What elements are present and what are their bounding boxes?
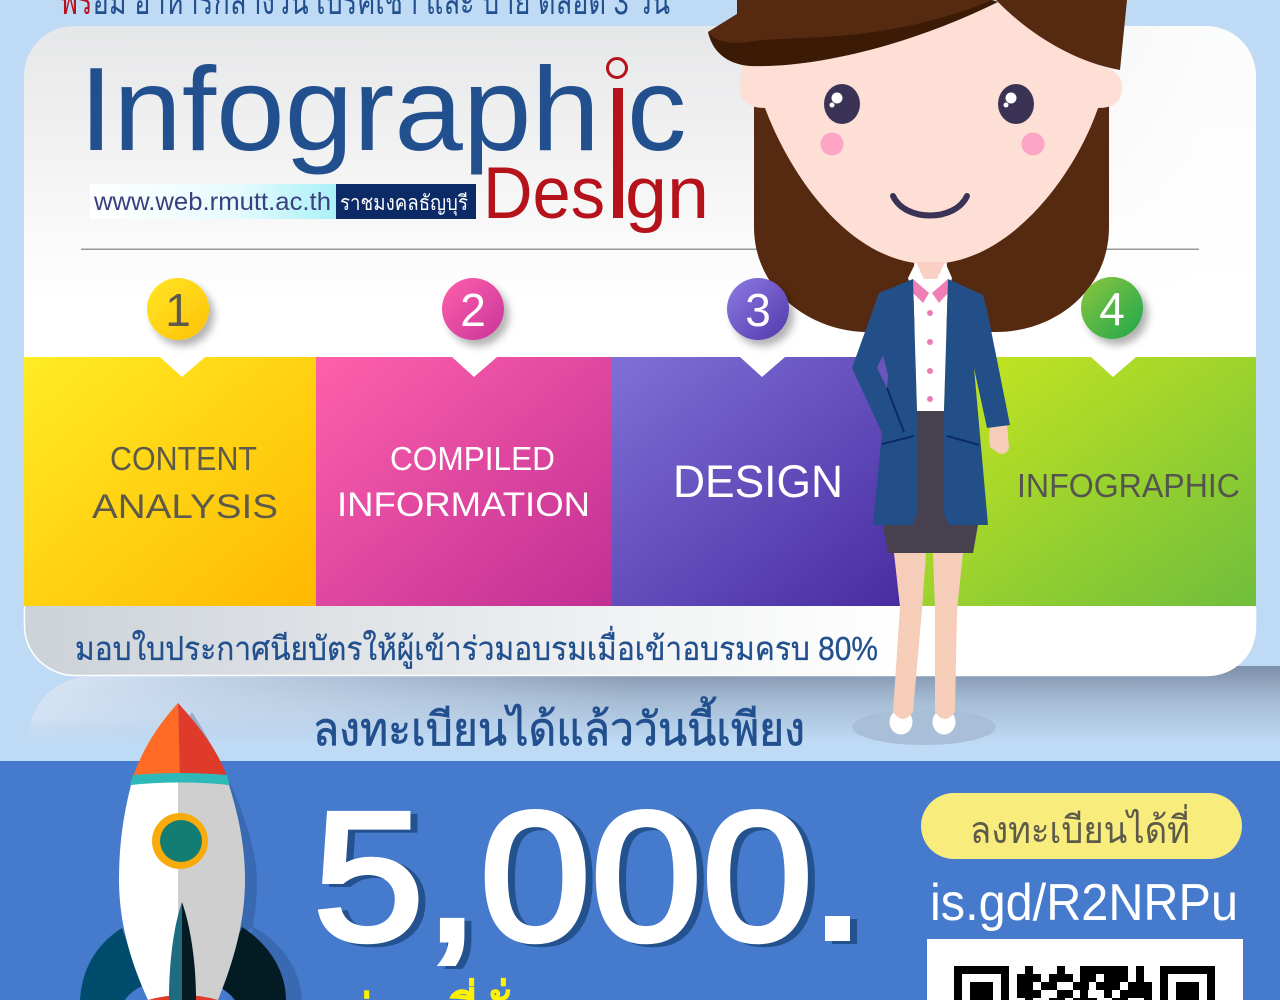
cheeks: [820, 132, 1044, 156]
shirt: [913, 279, 948, 411]
eyes: [824, 84, 1034, 124]
website bar: www.web.rmutt.ac.th: [93, 188, 331, 216]
legs: [890, 553, 963, 734]
certificate note: มอบใบประกาศนียบัตรให้ผู้เข้าร่วมอบรมเมื่อเข้าอบรมครบ 80%: [75, 626, 878, 669]
step 2 badge: 2: [460, 284, 486, 336]
bottom strip: [25, 606, 746, 675]
band 3: design: DESIGN: [673, 456, 843, 507]
price: 5,000: [313, 773, 813, 979]
QR code: [927, 939, 1243, 1000]
band 1: content analysis: CONTENT: [110, 440, 257, 477]
smile: [893, 196, 967, 216]
step 1 badge: [147, 278, 209, 340]
website bar: ราชมงคลธัญบุรี: [340, 192, 468, 216]
band 1: content analysis: ANALYSIS: [92, 488, 278, 526]
yellow note, cropped by page edge: [340, 978, 537, 1000]
step 2 badge: [442, 278, 504, 340]
price: 5,000: [320, 776, 820, 982]
step 3 badge: 3: [745, 284, 771, 336]
teal band: [130, 773, 230, 785]
right finder: [1160, 966, 1215, 1000]
band 1: content analysis: [24, 357, 316, 606]
skirt: [883, 411, 978, 553]
centre fin: [169, 902, 182, 1000]
title: Infographic: c: [627, 43, 686, 176]
jacket pockets: [882, 388, 979, 445]
step 1 badge: 1: [165, 284, 191, 336]
arm gap: [877, 355, 888, 388]
hand: [989, 424, 1009, 454]
website bar: [90, 184, 476, 219]
subtitle: Design: gn: [625, 153, 709, 234]
title: Infographic: [79, 43, 686, 218]
short url: is.gd/R2NRPu: [930, 874, 1238, 932]
fins: [80, 928, 142, 1000]
body: [119, 778, 178, 1000]
band 2: compiled information: [316, 357, 612, 606]
exhaust: [148, 995, 218, 1000]
collar: [913, 279, 948, 303]
character: woman: [708, 0, 1127, 745]
step 4 badge: [1081, 277, 1143, 339]
title: Infographic: Infograph: [79, 43, 600, 176]
band 4: infographic: INFOGRAPHIC: [1017, 467, 1240, 504]
panel reflection shadow: [29, 666, 1280, 734]
back hair: [754, 100, 1109, 332]
neck: [914, 262, 947, 292]
left finder: [954, 966, 1009, 1000]
main white panel: [24, 26, 1256, 676]
shirt buttons: [927, 310, 933, 402]
band 2: compiled information: COMPILED: [390, 440, 555, 477]
hat and bangs: [708, 0, 1127, 70]
rocket: [80, 703, 302, 1000]
band 2: compiled information: INFORMATION: [337, 486, 590, 524]
window: [152, 813, 208, 869]
rocket shadow: [131, 712, 302, 1000]
jacket: [852, 279, 1010, 525]
band 3: design: [612, 357, 912, 606]
face: [740, 0, 1122, 264]
subtitle: Design: [483, 153, 709, 234]
subtitle: Design: Des: [483, 153, 605, 234]
step 3 badge: [727, 278, 789, 340]
blue price band: [0, 761, 1280, 1000]
step 4 badge: 4: [1099, 283, 1125, 335]
panel bottom outline: [24, 606, 1256, 676]
register pill: [921, 793, 1242, 859]
registration heading: ลงทะเบียนได้แล้ววันนี้เพียง: [313, 696, 805, 755]
band 4: infographic: [912, 357, 1256, 606]
data modules: [1017, 966, 1152, 1000]
register pill: ลงทะเบียนได้ที่: [970, 804, 1190, 852]
nose cone: [133, 703, 180, 777]
